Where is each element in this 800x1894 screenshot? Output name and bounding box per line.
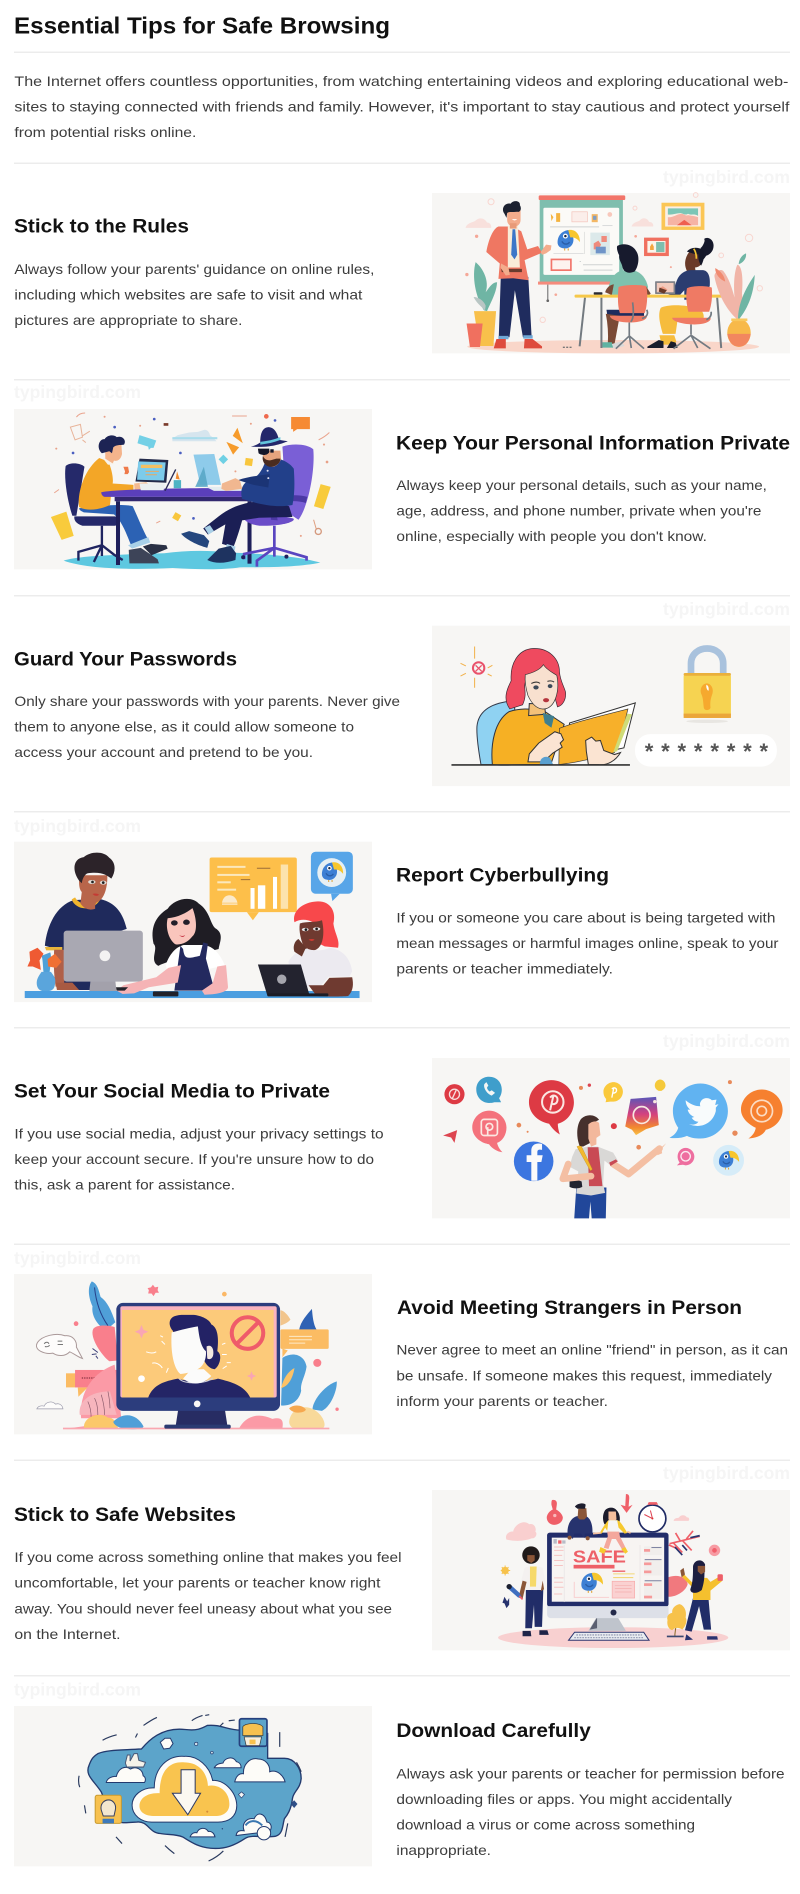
icon: twitter bubble xyxy=(670,1083,728,1139)
text: download carefully: download a virus or come across something xyxy=(396,1817,695,1833)
chat bubbles xyxy=(66,1329,329,1397)
intro paragraph: sites to staying connected with friends and family. However, it's important to stay cautious and protect yourself xyxy=(14,99,790,115)
presenter xyxy=(486,201,551,348)
heading: report cyberbullying: Report Cyberbullying xyxy=(396,865,609,887)
panel: stick to the rules: typingbird.com xyxy=(663,167,790,187)
panel: download carefully xyxy=(14,1680,785,1866)
text: safe websites xyxy=(14,1549,402,1642)
icon: bird badge xyxy=(713,1145,744,1176)
left man xyxy=(79,435,168,563)
padlock xyxy=(684,649,731,723)
student 2 xyxy=(647,238,714,348)
no sign xyxy=(232,1317,263,1349)
text: cyberbullying: If you or someone you care about is being targeted with xyxy=(396,909,775,925)
laptop xyxy=(135,459,181,491)
intro paragraph xyxy=(14,73,790,140)
panel: report cyberbullying xyxy=(14,816,779,1002)
text: passwords: Only share your passwords with your parents. Never give xyxy=(14,693,400,709)
bird bubble xyxy=(311,852,353,901)
vase xyxy=(27,948,62,991)
bottom foliage xyxy=(63,1365,329,1429)
icon: phone bubble xyxy=(476,1077,502,1103)
heading: avoid meeting strangers: Avoid Meeting Strangers in Person xyxy=(397,1297,742,1319)
panel: stick to the rules xyxy=(14,167,790,353)
right man xyxy=(181,427,294,563)
icon: instagram outline bubble xyxy=(472,1111,506,1152)
illustration: safe website monitor with people xyxy=(432,1490,790,1650)
text: download carefully xyxy=(396,1765,785,1858)
text: safe websites: away. You should never feel uneasy about what you see xyxy=(14,1600,392,1616)
plant xyxy=(667,1604,686,1637)
woman on top xyxy=(593,1508,631,1554)
person xyxy=(148,1315,250,1397)
decorations xyxy=(79,1715,301,1861)
text: safe websites: on the Internet. xyxy=(14,1626,120,1642)
arrow xyxy=(621,1494,633,1513)
woman right xyxy=(288,901,353,997)
panel: avoid meeting strangers xyxy=(14,1248,788,1434)
illustration: faceless person on monitor xyxy=(14,1274,372,1434)
title: Essential Tips for Safe Browsing xyxy=(14,12,390,38)
woman centre xyxy=(116,899,228,996)
intro paragraph: from potential risks online. xyxy=(14,124,196,140)
text: social media xyxy=(14,1125,384,1193)
heading: stick to the rules: Stick to the Rules xyxy=(14,216,189,238)
text: download carefully: inappropriate. xyxy=(396,1842,491,1858)
plants left xyxy=(467,262,497,347)
blue cloud xyxy=(88,1725,301,1848)
woman right xyxy=(680,1560,723,1640)
text: personal information xyxy=(396,477,767,544)
text: passwords: them to anyone else, as it could allow someone to xyxy=(14,719,354,735)
speech outlines xyxy=(36,1334,98,1409)
panel: keep your personal information private: typingbird.com xyxy=(14,382,141,402)
text: rules: pictures are appropriate to share. xyxy=(14,312,242,328)
text: cyberbullying xyxy=(396,909,779,977)
intro paragraph: The Internet offers countless opportunities, from watching entertaining videos and exploring educational web- xyxy=(14,73,789,89)
illustration: classroom presentation xyxy=(432,193,790,353)
icon: pinterest bubble xyxy=(529,1080,574,1134)
text: personal information: online, especially with people you don't know. xyxy=(396,528,707,544)
folder xyxy=(559,703,635,765)
monitor xyxy=(193,454,242,491)
white clouds xyxy=(106,1754,285,1840)
text: passwords xyxy=(14,693,400,760)
text: personal information: age, address, and phone number, private when you're xyxy=(396,503,762,519)
monitor xyxy=(64,931,143,994)
text: avoid meeting strangers: be unsafe. If someone makes this request, immediately xyxy=(396,1367,772,1383)
man on top xyxy=(567,1503,592,1540)
icon: red badge xyxy=(444,1084,465,1104)
sun icon xyxy=(461,647,492,688)
monitor xyxy=(547,1533,669,1631)
laptop xyxy=(258,964,328,996)
panel: report cyberbullying: typingbird.com xyxy=(14,816,141,836)
icon: orange target bubble xyxy=(741,1090,783,1139)
monitor xyxy=(116,1303,280,1429)
panel: stick to safe websites: typingbird.com xyxy=(663,1463,790,1483)
icon: instagram xyxy=(625,1097,659,1135)
text: safe websites: If you come across something online that makes you feel xyxy=(14,1549,402,1565)
man xyxy=(45,853,127,990)
right chair xyxy=(241,445,314,567)
icon: facebook xyxy=(514,1142,553,1181)
text: personal information: Always keep your personal details, such as your name, xyxy=(396,477,767,493)
panel: set your social media to private: typingbird.com xyxy=(663,1031,790,1051)
woman xyxy=(563,1115,666,1218)
chart bubble xyxy=(210,857,297,920)
panel: avoid meeting strangers: typingbird.com xyxy=(14,1248,141,1268)
sparkles xyxy=(74,1285,339,1411)
small icons xyxy=(95,1719,267,1823)
plant right xyxy=(714,253,755,347)
text: social media: this, ask a parent for assistance. xyxy=(14,1177,235,1193)
text: rules: Always follow your parents' guidance on online rules, xyxy=(14,261,374,277)
text: download carefully: Always ask your parents or teacher for permission before xyxy=(396,1765,785,1781)
wall frames xyxy=(644,203,704,256)
text: avoid meeting strangers: inform your parents or teacher. xyxy=(396,1393,608,1409)
confetti xyxy=(51,413,331,540)
heading: social media: Set Your Social Media to Private xyxy=(14,1080,330,1102)
branch xyxy=(669,1531,700,1555)
illustration: three people at computers xyxy=(14,842,372,1002)
illustration: cloud download xyxy=(14,1706,372,1866)
left chair xyxy=(65,463,123,562)
illustration: two people at table xyxy=(14,409,372,569)
heading: safe websites: Stick to Safe Websites xyxy=(14,1504,236,1526)
text: avoid meeting strangers xyxy=(396,1342,788,1409)
text: passwords: access your account and pretend to be you. xyxy=(14,744,313,760)
girl xyxy=(477,648,566,765)
text: social media: keep your account secure. If you're unsure how to do xyxy=(14,1151,374,1167)
foliage xyxy=(89,1281,337,1411)
text: download carefully: downloading files or apps. You might accidentally xyxy=(396,1791,732,1807)
panel: set your social media to private xyxy=(14,1031,790,1218)
heading: personal information: Keep Your Personal Information Private xyxy=(396,432,790,454)
panel: guard your passwords: typingbird.com xyxy=(663,599,790,619)
monitor: SAFE xyxy=(573,1546,626,1566)
password pill xyxy=(635,734,777,767)
icon: arrow xyxy=(443,1130,457,1143)
table xyxy=(101,488,268,565)
illustration: social media bubbles xyxy=(432,1058,790,1218)
text: avoid meeting strangers: Never agree to meet an online "friend" in person, as it can xyxy=(396,1342,788,1358)
student 1 xyxy=(602,244,651,349)
table xyxy=(575,292,728,348)
keyboard xyxy=(569,1632,649,1640)
text: social media: If you use social media, adjust your privacy settings to xyxy=(14,1125,384,1141)
icon: clock xyxy=(639,1502,666,1532)
dots xyxy=(517,1079,738,1150)
panel: keep your personal information private xyxy=(14,382,790,569)
panel: guard your passwords xyxy=(14,599,790,786)
icon: yellow p bubble xyxy=(603,1082,623,1102)
heading: download carefully: Download Carefully xyxy=(396,1720,591,1742)
text: safe websites: uncomfortable, let your parents or teacher know right xyxy=(14,1575,381,1591)
chairs xyxy=(610,285,712,349)
icon: lock xyxy=(547,1500,563,1525)
password pill: ******** xyxy=(645,739,769,764)
presentation board xyxy=(538,195,627,302)
text: cyberbullying: mean messages or harmful images online, speak to your xyxy=(396,935,779,951)
woman left xyxy=(506,1546,549,1636)
arrow xyxy=(172,1770,201,1815)
icon: pink p bubble xyxy=(677,1148,694,1165)
heading: guard your passwords: Guard Your Passwords xyxy=(14,648,237,670)
illustration: girl reading with padlock xyxy=(432,626,790,786)
hands xyxy=(528,732,621,765)
panel: stick to safe websites xyxy=(14,1463,790,1650)
panel: download carefully: typingbird.com xyxy=(14,1680,141,1700)
text: rules xyxy=(14,261,374,328)
central cloud xyxy=(132,1756,237,1822)
text: cyberbullying: parents or teacher immediately. xyxy=(396,961,613,977)
text: rules: including which websites are safe to visit and what xyxy=(14,287,363,303)
